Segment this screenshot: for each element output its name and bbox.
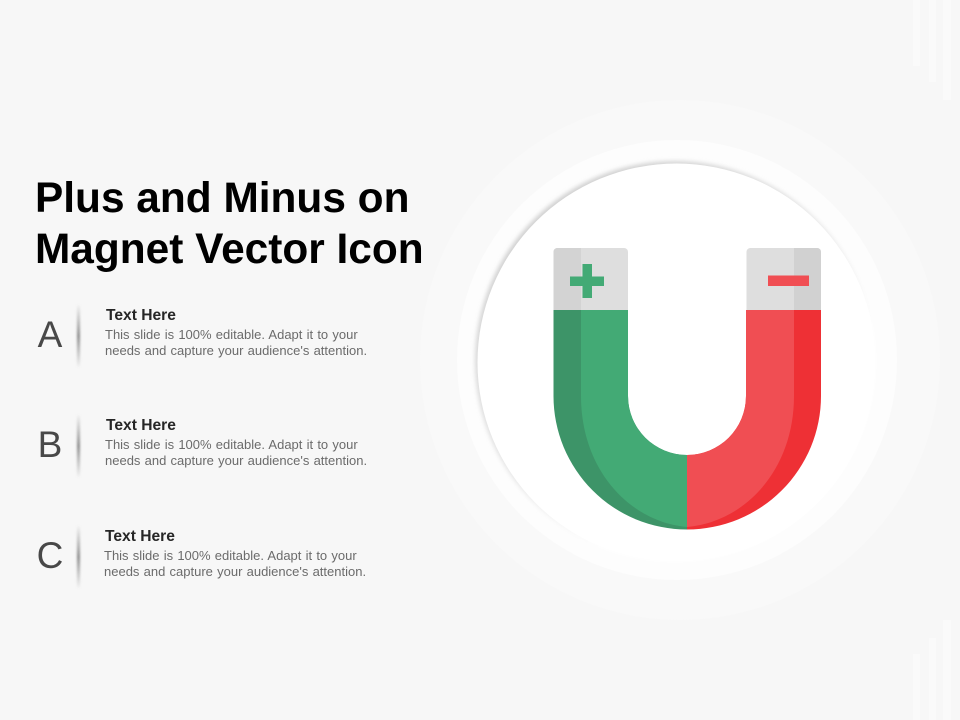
divider C (77, 525, 80, 589)
title: Plus and Minus on (35, 174, 409, 221)
description B: This slide is 100% editable. Adapt it to your (105, 437, 358, 452)
description A: This slide is 100% editable. Adapt it to your (105, 327, 358, 342)
description C: needs and capture your audience's attention. (104, 564, 366, 579)
item C (37, 528, 366, 586)
left pole cap (554, 248, 628, 310)
letter B: B (38, 424, 62, 465)
right pole cap (746, 248, 821, 310)
item B (38, 417, 367, 475)
description C (104, 548, 366, 579)
title (35, 174, 424, 272)
minus sign (768, 276, 809, 286)
letter A: A (38, 314, 62, 355)
item A (38, 307, 367, 365)
description A (105, 327, 367, 358)
divider A (77, 304, 80, 368)
description A: needs and capture your audience's attention. (105, 343, 367, 358)
heading C: Text Here (105, 528, 175, 545)
title: Magnet Vector Icon (35, 225, 424, 272)
description B: needs and capture your audience's attention. (105, 453, 367, 468)
plus sign (570, 264, 604, 298)
red arm (687, 310, 821, 530)
icon: horseshoe magnet (554, 248, 821, 530)
heading B: Text Here (106, 417, 176, 434)
green arm (554, 310, 687, 530)
heading A: Text Here (106, 307, 176, 324)
letter C: C (37, 535, 63, 576)
description B (105, 437, 367, 468)
description C: This slide is 100% editable. Adapt it to your (104, 548, 357, 563)
divider B (77, 414, 80, 478)
